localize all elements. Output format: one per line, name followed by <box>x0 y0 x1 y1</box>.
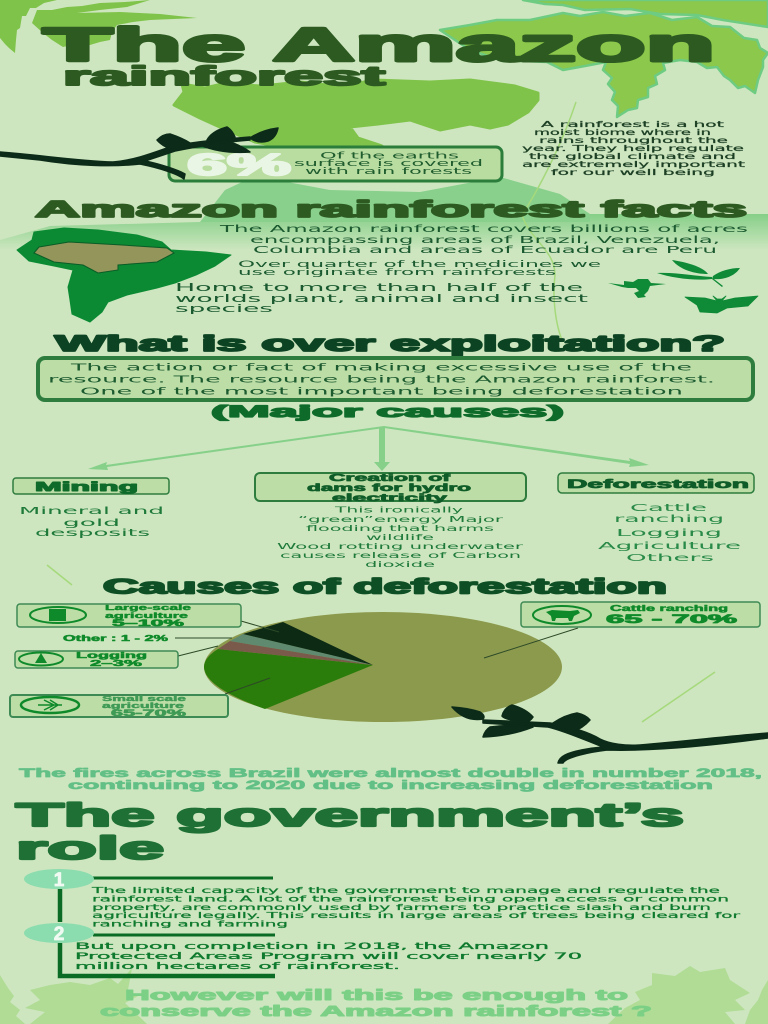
branch bottom <box>452 705 768 763</box>
panel: dams: dioxide <box>365 560 435 569</box>
label: other: Other : 1 - 2% <box>63 634 168 643</box>
callout: small scale agriculture <box>10 695 228 718</box>
callout: cattle ranching: Cattle ranching <box>610 604 728 613</box>
callout: large-scale agriculture: 5–10% <box>112 618 184 628</box>
callout: 6% of earth: 6% <box>187 147 291 182</box>
panel: deforestation: Logging <box>616 528 722 539</box>
panel: mining <box>13 478 169 539</box>
panel: dams <box>255 473 526 569</box>
text: facts: encompassing areas of Brazil, Venezuela, <box>250 235 720 246</box>
text: rainforest definition: for our well being <box>551 168 716 177</box>
text: rainforest definition: year. They help regulate <box>522 144 745 153</box>
arrows <box>88 426 649 471</box>
text: facts: Columbia and areas of Ecuador are Peru <box>253 245 717 256</box>
text: step 2 <box>75 942 582 972</box>
callout: large-scale agriculture: agriculture <box>105 613 188 620</box>
fern leaves top right <box>440 0 768 117</box>
text: fires: continuing to 2020 due to increasing deforestation <box>68 778 713 792</box>
panel: deforestation <box>558 473 754 564</box>
branch top <box>0 127 278 179</box>
step 1 marker: 1 <box>54 870 65 891</box>
panel: mining: gold <box>63 518 120 529</box>
map: rainforest silhouette <box>174 80 538 150</box>
title <box>43 18 715 91</box>
panel: definition: resource. The resource being the Amazon rainforest. <box>48 374 715 386</box>
panel: dams: wildlife <box>366 533 434 542</box>
text: rainforest definition: are extremely important <box>522 160 745 169</box>
text: step 2: million hectares of rainforest. <box>75 962 400 972</box>
panel: deforestation: ranching <box>614 514 724 525</box>
text: step 1: property, are commonly used by farmers to practice slash and burn <box>92 903 712 912</box>
panel: deforestation: Cattle <box>630 503 707 514</box>
callout: 6% of earth <box>169 147 502 182</box>
panel: dams: This ironically <box>333 506 464 514</box>
hill and gradient band <box>0 176 768 262</box>
fern leaves bottom <box>0 966 768 1024</box>
text: rainforest definition <box>522 120 745 177</box>
heading: major causes: (Major causes) <box>211 402 564 421</box>
title: The Amazon <box>43 18 715 71</box>
text: fires: The fires across Brazil were almost double in number 2018, <box>19 766 762 780</box>
text: step 1: The limited capacity of the government to manage and regulate the <box>90 886 721 895</box>
text: facts: Home to more than half of the <box>175 281 584 294</box>
text: facts: Over quarter of the medicines we <box>238 260 601 270</box>
callout: 6% of earth: Of the earths <box>320 152 460 162</box>
text: rainforest definition: rains throughout the <box>539 136 729 145</box>
text: step 1: rainforest land. A lot of the rainforest being open access or common <box>92 894 730 904</box>
text: facts: use originate from rainforests <box>238 268 557 278</box>
timeline <box>24 869 275 976</box>
step 2 marker <box>24 923 94 945</box>
icon: leaves <box>657 260 740 287</box>
callout: small scale agriculture: agriculture <box>102 703 184 710</box>
panel: dams: flooding that harms <box>306 524 494 533</box>
heading: government's role: The government’s <box>16 797 684 833</box>
closing question <box>100 987 652 1020</box>
text: step 2: But upon completion in 2018, the Amazon <box>75 942 549 952</box>
step 2 marker: 2 <box>54 924 64 945</box>
step 1 marker <box>24 869 94 891</box>
callout: logging: 2–3% <box>90 659 142 668</box>
panel: dams: Wood rotting underwater <box>277 542 525 551</box>
callout: cattle ranching: 65 - 70% <box>606 612 738 626</box>
text: fires <box>19 766 762 792</box>
text: step 1 <box>90 886 742 928</box>
callout: 6% of earth: with rain forests <box>305 167 473 177</box>
pie chart <box>175 612 578 722</box>
panel: definition: One of the most important being deforestation <box>80 386 683 398</box>
callout: cattle ranching <box>521 602 760 627</box>
text: step 1: agriculture legally. This results in large areas of trees being cleared for <box>92 911 742 920</box>
panel: dams: electricity <box>332 493 448 504</box>
panel: mining: desposits <box>35 528 150 539</box>
panel: dams: Creation of <box>329 473 452 484</box>
map: South America <box>17 228 231 322</box>
text: step 2: Protected Areas Program will cover nearly 70 <box>75 952 582 962</box>
panel: deforestation: Deforestation <box>567 477 749 491</box>
heading: facts: Amazon rainforest facts <box>35 196 747 222</box>
callout: logging: Logging <box>76 651 147 660</box>
panel: definition <box>38 358 753 400</box>
title: rainforest <box>63 61 385 91</box>
panel: deforestation: Agriculture <box>598 541 741 552</box>
callout: large-scale agriculture <box>17 604 241 628</box>
text: facts: species <box>175 302 274 315</box>
vines <box>47 102 715 722</box>
heading: government's role <box>16 797 684 866</box>
text: facts <box>175 224 748 315</box>
icon: frog <box>608 279 666 298</box>
panel: dams: dams for hydro <box>307 483 471 494</box>
panel: mining: Mineral and <box>19 506 164 517</box>
closing question: However will this be enough to <box>125 987 628 1004</box>
panel: mining: Mining <box>35 480 138 494</box>
icon: butterfly <box>685 296 758 313</box>
callout: large-scale agriculture: Large-scale <box>105 605 191 612</box>
heading: government's role: role <box>16 830 164 866</box>
text: facts: The Amazon rainforest covers billions of acres <box>218 224 748 235</box>
text: step 1: ranching and farming <box>92 920 289 928</box>
panel: dams: causes release of Carbon <box>280 551 521 560</box>
heading: causes of deforestation: Causes of deforestation <box>103 576 667 598</box>
panel: definition: The action or fact of making excessive use of the <box>68 362 692 374</box>
text: rainforest definition: A rainforest is a hot <box>541 120 724 129</box>
fern leaves top left <box>0 0 197 53</box>
closing question: conserve the Amazon rainforest ? <box>100 1003 652 1020</box>
callout: logging <box>15 651 178 668</box>
callout: 6% of earth: surface is covered <box>294 159 483 169</box>
text: rainforest definition: moist biome where in <box>534 128 712 137</box>
text: rainforest definition: the global climate and <box>529 152 737 161</box>
callout: small scale agriculture: Small scale <box>102 696 186 703</box>
panel: deforestation: Others <box>626 553 714 564</box>
heading: over exploitation: What is over exploitation? <box>55 331 725 356</box>
text: facts: worlds plant, animal and insect <box>175 292 590 305</box>
panel: dams: “green”energy Major <box>298 515 505 524</box>
callout: small scale agriculture: 65-70% <box>111 708 186 718</box>
